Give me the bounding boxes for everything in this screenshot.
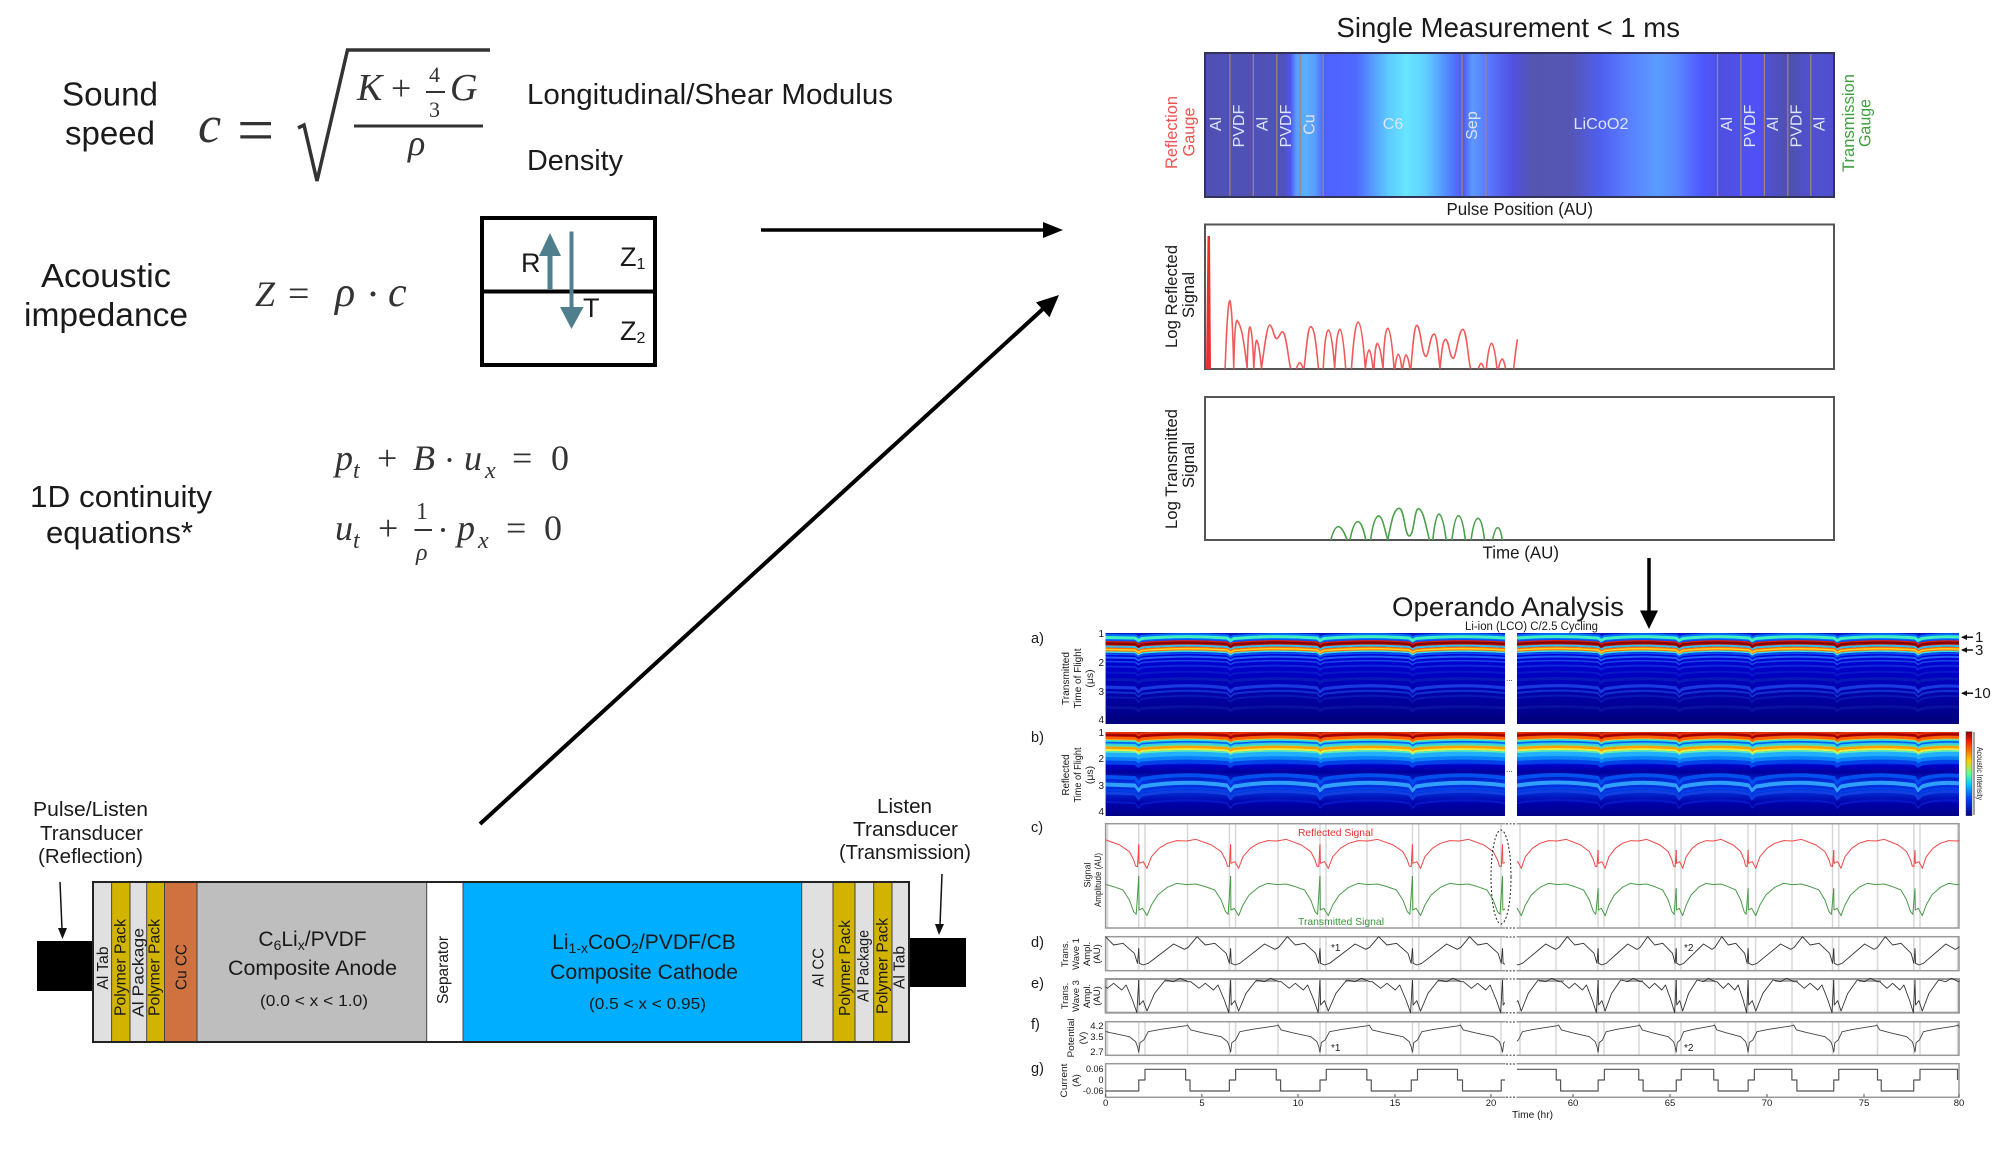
panel a: transmitted time of flight (1031, 629, 1960, 726)
diagram: battery cell layers: Separator (435, 935, 452, 1004)
chart: pulse position heatmap: Al (1208, 117, 1225, 131)
diagram: battery cell layers: Al Tab (95, 946, 112, 990)
formula: continuity equation one: p (332, 438, 353, 478)
chart: log transmitted signal (1205, 397, 1834, 540)
panel d: wave 1 amplitude: (AU) (1092, 944, 1103, 964)
label: pulse/listen transducer: Transducer (40, 823, 143, 845)
chart: pulse position heatmap (1205, 53, 1834, 197)
label: acoustic impedance (24, 257, 188, 333)
axis: time ticks: 5 (1199, 1098, 1205, 1109)
text: composite anode: /PVDF (305, 928, 367, 951)
diagram: impedance interface: 2 (636, 330, 646, 347)
formula: acoustic impedance: = (288, 273, 309, 315)
text: composite cathode: (0.5 < x < 0.95) (589, 996, 706, 1013)
label: transmission gauge (1840, 74, 1874, 172)
arrow: right transducer (935, 874, 944, 935)
axis label: log transmitted signal: Log Transmitted (1162, 409, 1181, 529)
panel d: wave 1 amplitude (1031, 935, 1996, 971)
icon: transmitted arrow (560, 232, 584, 329)
formula: continuity equation one: + (377, 438, 397, 478)
formula: continuity equation one: = (512, 438, 532, 478)
label: acoustic impedance: Acoustic (41, 257, 171, 294)
diagram: battery cell layers: Polymer Pack (837, 919, 854, 1016)
formula: continuity equation two: 0 (544, 508, 562, 548)
text: composite anode: Composite Anode (228, 957, 397, 980)
label: sound speed (62, 76, 158, 152)
panel d: wave 1 amplitude: d) (1031, 935, 1044, 951)
label: reflection gauge (1163, 96, 1198, 169)
formula: sound speed (198, 50, 490, 181)
panel a: transmitted time of flight: 4 (1098, 715, 1104, 726)
panel c: signal amplitude: c) (1031, 820, 1043, 836)
arrow: cell to measurement (480, 295, 1059, 824)
formula: continuity equation two: u (335, 508, 353, 548)
chart: pulse position heatmap: PVDF (1231, 104, 1248, 147)
panel b: reflected time of flight: 2 (1098, 754, 1104, 765)
panel a: transmitted time of flight: Time of Flight (1072, 648, 1084, 708)
formula: sound speed: + (391, 68, 411, 108)
text: composite cathode: /PVDF/CB (639, 931, 736, 954)
legend: acoustic intensity colorbar (1966, 732, 1985, 816)
panel b: reflected time of flight: 4 (1098, 807, 1104, 818)
panel g: current (1031, 1061, 1959, 1098)
subtitle: cycling condition: Li-ion (LCO) C/2.5 Cycling (1465, 621, 1598, 633)
panel a: transmitted time of flight: 3 (1098, 687, 1104, 698)
formula: sound speed: K (356, 67, 384, 109)
panel b: reflected time of flight: 1 (1098, 728, 1104, 739)
label: listen transducer (839, 796, 971, 864)
label: 1D continuity equations: equations* (46, 515, 193, 550)
chart: pulse position heatmap: Cu (1302, 114, 1318, 135)
panel g: current: 0.06 (1086, 1064, 1104, 1074)
formula: sound speed: c (198, 97, 221, 154)
axis: time ticks: 10 (1293, 1098, 1303, 1109)
formula: continuity equation two: ρ (415, 540, 428, 566)
chart: pulse position heatmap: Sep (1464, 111, 1481, 140)
axis: time ticks: 65 (1665, 1098, 1675, 1109)
panel c: signal amplitude (1031, 820, 1996, 928)
panel a: transmitted time of flight: 1 (1098, 629, 1104, 640)
formula: acoustic impedance (255, 270, 407, 316)
icon: reflected arrow (539, 233, 561, 290)
axis: time ticks: 60 (1568, 1098, 1578, 1109)
diagram: battery cell layers: Al Tab (892, 946, 908, 989)
axis: time ticks: 0 (1103, 1098, 1108, 1109)
panel d: wave 1 amplitude: Ampl. (1082, 942, 1093, 966)
formula: continuity equation one: u (464, 438, 482, 478)
text: composite cathode: Li (552, 931, 569, 954)
panel a: transmitted time of flight: a) (1031, 631, 1044, 647)
panel f: potential: 2.7 (1090, 1047, 1104, 1058)
panel f: potential: (V) (1078, 1032, 1089, 1044)
label: reflection gauge: Gauge (1180, 108, 1198, 156)
panel g: current: g) (1031, 1061, 1044, 1077)
formula: sound speed: 3 (429, 97, 440, 122)
text: composite anode: Li (281, 928, 298, 951)
panel f: potential: *1 (1331, 1043, 1341, 1054)
diagram: battery cell layers: Polymer Pack (874, 917, 892, 1014)
callouts: wave arrows: 10 (1974, 685, 1991, 702)
label: acoustic impedance: impedance (24, 296, 188, 333)
formula: acoustic impedance: ρ (333, 270, 355, 316)
panel e: wave 3 amplitude (1031, 976, 1996, 1013)
panel d: wave 1 amplitude: Wave 1 (1071, 938, 1082, 970)
panel g: current: (A) (1071, 1074, 1082, 1087)
text: composite anode: C (258, 928, 274, 951)
chart: pulse position heatmap: PVDF (1788, 104, 1806, 147)
panel b: reflected time of flight: b) (1031, 730, 1044, 746)
annotation: density: Density (527, 145, 623, 177)
diagram: battery cell layers (93, 882, 909, 1042)
label: reflection gauge: Reflection (1163, 96, 1181, 169)
panel b: reflected time of flight: Time of Flight (1072, 747, 1084, 802)
axis label: log transmitted signal: Signal (1179, 442, 1198, 488)
text: composite cathode (550, 931, 738, 1013)
axis: time ticks (1103, 1094, 1964, 1109)
formula: sound speed: ρ (407, 123, 425, 163)
formula: continuity equation two: t (353, 528, 361, 554)
chart: pulse position heatmap: Al (1812, 117, 1828, 131)
panel c: signal amplitude: Reflected Signal (1298, 827, 1373, 839)
axis: time ticks: 20 (1486, 1098, 1496, 1109)
axis break markers: ... (1506, 674, 1513, 683)
panel d: wave 1 amplitude: Trans. (1060, 941, 1071, 967)
diagram: battery cell layers: Al Package (856, 930, 872, 1002)
arrow: left transducer (58, 882, 67, 939)
panel a: transmitted time of flight: 2 (1098, 658, 1104, 669)
panel g: current: 0 (1098, 1075, 1104, 1085)
text: composite cathode: Composite Cathode (550, 961, 738, 984)
axis label: time: Time (AU) (1482, 542, 1559, 562)
chart: pulse position heatmap: PVDF (1742, 104, 1759, 147)
axis: time ticks: 70 (1762, 1098, 1772, 1109)
diagram: battery cell layers: Al Package (130, 928, 148, 1017)
panel b: reflected time of flight (1031, 728, 1960, 818)
label: listen transducer: Listen (877, 796, 932, 818)
label: 1D continuity equations: 1D continuity (30, 479, 212, 514)
panel d: wave 1 amplitude: *2 (1684, 943, 1694, 954)
axis label: time in hours: Time (hr) (1512, 1109, 1553, 1121)
formula: sound speed: = (237, 94, 274, 167)
diagram: impedance interface: Z (620, 242, 636, 272)
panel c: signal amplitude: Amplitude (AU) (1093, 853, 1104, 907)
axis label: log reflected signal: Log Reflected (1162, 245, 1181, 348)
legend: acoustic intensity colorbar: Acoustic Intensity (1975, 747, 1985, 801)
text: composite anode: (0.0 < x < 1.0) (260, 993, 368, 1010)
arrow: measurement to operando (1640, 558, 1658, 629)
panel d: wave 1 amplitude: *1 (1331, 943, 1341, 954)
panel e: wave 3 amplitude: Ampl. (1082, 984, 1093, 1008)
chart: pulse position heatmap: C6 (1383, 116, 1403, 133)
panel c: signal amplitude: Transmitted Signal (1298, 916, 1384, 928)
label: listen transducer: (Transmission) (839, 842, 971, 864)
panel e: wave 3 amplitude: e) (1031, 976, 1044, 992)
diagram: impedance interface: 1 (636, 256, 646, 273)
panel a: transmitted time of flight: (μs) (1084, 669, 1096, 688)
formula: continuity equation one (332, 438, 569, 484)
label: pulse/listen transducer (33, 799, 148, 868)
panel c: signal amplitude: Signal (1082, 862, 1094, 888)
text: composite anode: x (298, 937, 305, 953)
chart: pulse position heatmap: LiCoO2 (1574, 116, 1629, 133)
panel e: wave 3 amplitude: Trans. (1060, 983, 1071, 1009)
formula: continuity equation two: 1 (416, 499, 428, 525)
formula: continuity equation two: p (454, 508, 475, 548)
formula: continuity equation two: = (506, 508, 526, 548)
arrow: equations to measurement (761, 222, 1063, 238)
panel f: potential: 4.2 (1090, 1021, 1104, 1032)
label: 1D continuity equations (30, 479, 212, 550)
formula: continuity equation two (335, 499, 562, 566)
diagram: battery cell layers: Cu CC (174, 944, 190, 990)
panel f: potential: 3.5 (1090, 1032, 1104, 1043)
label: sound speed: speed (65, 114, 155, 152)
diagram: battery cell layers: Polymer Pack (112, 918, 130, 1016)
diagram: impedance interface: R (521, 248, 540, 278)
axis: time ticks: 15 (1390, 1098, 1400, 1109)
label: listen transducer: Transducer (853, 819, 958, 841)
axis: time ticks: 80 (1954, 1098, 1964, 1109)
label: transmission gauge: Transmission (1840, 74, 1858, 172)
formula: continuity equation one: B (413, 438, 435, 478)
annotation: modulus: Longitudinal/Shear Modulus (527, 79, 893, 111)
panel a: transmitted time of flight: Transmitted (1060, 652, 1072, 705)
panel e: wave 3 amplitude: (AU) (1092, 986, 1103, 1006)
panel f: potential: Potential (1066, 1018, 1077, 1058)
label: pulse/listen transducer: (Reflection) (38, 846, 143, 868)
chart: pulse position heatmap: Al (1719, 117, 1736, 131)
diagram: impedance interface: Z (620, 316, 636, 346)
chart: pulse position heatmap: Al (1765, 117, 1782, 131)
panel f: potential (1031, 1017, 1996, 1058)
text: composite anode: 6 (274, 937, 282, 953)
formula: sound speed: 4 (429, 62, 440, 87)
formula: continuity equation one: t (353, 458, 361, 484)
formula: continuity equation two: x (477, 528, 489, 554)
diagram: battery cell layers: Polymer Pack (146, 918, 164, 1016)
axis break markers (1506, 674, 1516, 1100)
axis break markers: ... (1506, 765, 1513, 774)
panel f: potential: f) (1031, 1017, 1040, 1033)
callouts: wave arrows: 1 (1975, 629, 1983, 646)
axis label: log reflected signal: Signal (1179, 272, 1198, 318)
panel b: reflected time of flight: (μs) (1084, 766, 1096, 784)
diagram: impedance interface: T (583, 293, 600, 323)
panel g: current: -0.06 (1083, 1086, 1104, 1096)
formula: sound speed: G (450, 67, 477, 109)
panel f: potential: *2 (1684, 1043, 1694, 1054)
panel g: current: Current (1059, 1063, 1070, 1098)
title: operando analysis: Operando Analysis (1392, 592, 1624, 622)
callout: dotted ellipse (1491, 830, 1511, 924)
text: composite cathode: 2 (631, 940, 639, 956)
panel e: wave 3 amplitude: Wave 3 (1071, 980, 1082, 1012)
label: sound speed: Sound (62, 76, 158, 112)
text: composite cathode: CoO (588, 931, 631, 954)
axis label: pulse position: Pulse Position (AU) (1446, 199, 1593, 219)
icon: left transducer block (37, 941, 93, 991)
icon: right transducer block (909, 938, 966, 987)
axis: time ticks: 75 (1859, 1098, 1869, 1109)
formula: acoustic impedance: c (388, 270, 407, 316)
axis label: log reflected signal (1162, 245, 1198, 348)
panel b: reflected time of flight: 3 (1098, 781, 1104, 792)
text: composite anode (228, 928, 397, 1010)
title: single measurement: Single Measurement < 1 ms (1336, 12, 1680, 43)
callouts: wave arrows: 3 (1975, 642, 1983, 659)
label: transmission gauge: Gauge (1856, 99, 1874, 147)
text: composite cathode: 1-x (569, 940, 588, 956)
formula: continuity equation one: 0 (551, 438, 569, 478)
diagram: impedance interface (482, 218, 655, 365)
formula: continuity equation one: x (484, 458, 496, 484)
label: pulse/listen transducer: Pulse/Listen (33, 799, 148, 821)
diagram: battery cell layers: Al CC (810, 948, 828, 987)
formula: acoustic impedance: Z (255, 274, 276, 314)
callouts: wave arrows (1961, 629, 1991, 702)
chart: pulse position heatmap: Al (1254, 117, 1272, 131)
chart: pulse position heatmap: PVDF (1278, 104, 1295, 147)
axis label: log transmitted signal (1162, 409, 1198, 529)
chart: log reflected signal (1205, 224, 1834, 369)
formula: continuity equation two: + (378, 508, 398, 548)
panel b: reflected time of flight: Reflected (1060, 754, 1072, 796)
